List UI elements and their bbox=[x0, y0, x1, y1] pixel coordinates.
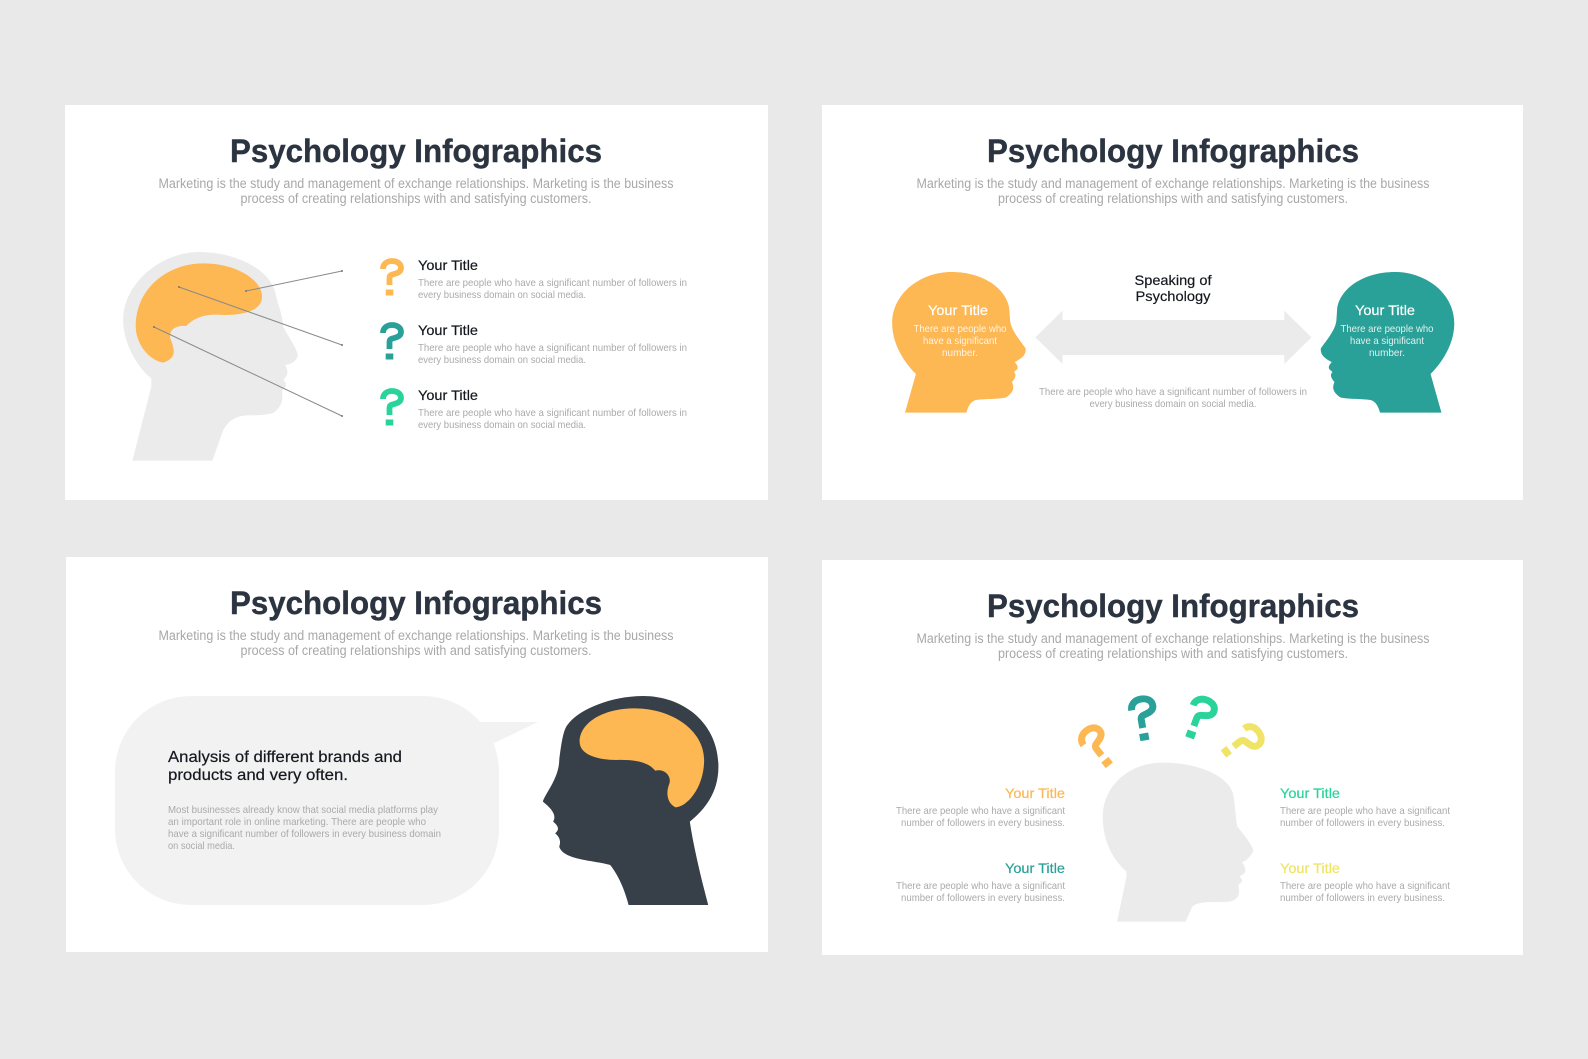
right lower text bbox=[1280, 860, 1450, 904]
grey head bbox=[1103, 763, 1253, 922]
item 2 text: There are people who have a significant number of followers in bbox=[418, 343, 687, 354]
bubble heading: products and very often. bbox=[168, 767, 348, 784]
bubble heading bbox=[168, 749, 402, 784]
icon: teal question mark bbox=[383, 325, 401, 360]
panel: brain regions bbox=[65, 105, 768, 500]
subtitle: process of creating relationships with and satisfying customers. bbox=[998, 646, 1348, 661]
double arrow bbox=[1035, 311, 1312, 364]
title: Psychology Infographics bbox=[230, 133, 602, 169]
teal head text: There are people who bbox=[1340, 324, 1434, 335]
item 3 text: There are people who have a significant number of followers in bbox=[418, 408, 687, 419]
right upper text: There are people who have a significant bbox=[1280, 806, 1450, 817]
arrow heading bbox=[1134, 272, 1212, 304]
left lower text: There are people who have a significant bbox=[896, 881, 1065, 892]
left upper text: number of followers in every business. bbox=[901, 818, 1065, 829]
item 3 text: every business domain on social media. bbox=[418, 420, 586, 431]
orange head text: have a significant bbox=[923, 336, 997, 347]
item 1 text: Your Title bbox=[418, 257, 478, 273]
subtitle: Marketing is the study and management of exchange relationships. Marketing is the business bbox=[916, 176, 1430, 191]
left upper text: Your Title bbox=[1005, 785, 1065, 801]
title: Psychology Infographics bbox=[230, 585, 602, 621]
teal head text: number. bbox=[1369, 348, 1405, 359]
teal head bbox=[1321, 272, 1454, 413]
item 3 text bbox=[418, 387, 687, 431]
right upper text bbox=[1280, 785, 1450, 829]
right upper text: number of followers in every business. bbox=[1280, 818, 1445, 829]
subtitle: Marketing is the study and management of exchange relationships. Marketing is the business bbox=[158, 176, 674, 191]
bubble description: Most businesses already know that social media platforms play bbox=[168, 805, 439, 816]
arrow heading: Psychology bbox=[1136, 288, 1210, 304]
bubble heading: Analysis of different brands and bbox=[168, 749, 402, 766]
item 1 text: There are people who have a significant number of followers in bbox=[418, 278, 687, 289]
panel: speaking of psychology bbox=[822, 105, 1523, 500]
subtitle bbox=[916, 631, 1430, 661]
icon: green question mark bbox=[383, 391, 401, 426]
connector lines bbox=[153, 270, 343, 417]
teal head text: Your Title bbox=[1355, 302, 1415, 318]
panel: question marks over head bbox=[822, 560, 1523, 955]
left lower text: number of followers in every business. bbox=[901, 893, 1065, 904]
right lower text: There are people who have a significant bbox=[1280, 881, 1450, 892]
orange head text: number. bbox=[942, 348, 978, 359]
orange head text: There are people who bbox=[914, 324, 1007, 335]
bubble description bbox=[168, 805, 441, 852]
arrow description: There are people who have a significant number of followers in bbox=[1039, 387, 1307, 398]
subtitle: Marketing is the study and management of exchange relationships. Marketing is the business bbox=[158, 628, 674, 643]
subtitle bbox=[916, 176, 1430, 206]
teal head text: have a significant bbox=[1350, 336, 1424, 347]
item 3 text: Your Title bbox=[418, 387, 478, 403]
subtitle: process of creating relationships with and satisfying customers. bbox=[240, 643, 592, 658]
subtitle: process of creating relationships with and satisfying customers. bbox=[998, 191, 1348, 206]
subtitle bbox=[158, 176, 674, 206]
head with highlighted brain bbox=[123, 252, 298, 461]
orange head bbox=[892, 272, 1026, 413]
bubble description: on social media. bbox=[168, 841, 235, 852]
arrow heading: Speaking of bbox=[1134, 272, 1212, 288]
speech bubble bbox=[115, 696, 538, 905]
left upper text bbox=[896, 785, 1065, 829]
item 2 text: Your Title bbox=[418, 322, 478, 338]
orange head text: Your Title bbox=[928, 302, 988, 318]
right lower text: Your Title bbox=[1280, 860, 1340, 876]
right upper text: Your Title bbox=[1280, 785, 1340, 801]
bubble description: an important role in online marketing. There are people who bbox=[168, 817, 426, 828]
icon: orange tilted question mark bbox=[1078, 724, 1120, 770]
left upper text: There are people who have a significant bbox=[896, 806, 1065, 817]
item 2 text bbox=[418, 322, 687, 366]
item 2 text: every business domain on social media. bbox=[418, 355, 586, 366]
item 1 text bbox=[418, 257, 687, 301]
right lower text: number of followers in every business. bbox=[1280, 893, 1445, 904]
panel: speech bubble and dark head bbox=[66, 557, 768, 952]
orange head text bbox=[914, 302, 1007, 359]
title: Psychology Infographics bbox=[987, 588, 1359, 624]
icon: orange question mark bbox=[383, 261, 401, 296]
subtitle: process of creating relationships with and satisfying customers. bbox=[240, 191, 592, 206]
bubble description: have a significant number of followers in every business domain bbox=[168, 829, 441, 840]
item 1 text: every business domain on social media. bbox=[418, 290, 586, 301]
title: Psychology Infographics bbox=[987, 133, 1359, 169]
icon: teal tilted question mark bbox=[1130, 697, 1158, 742]
arrow description bbox=[1039, 387, 1307, 410]
left lower text bbox=[896, 860, 1065, 904]
dark head with brain bbox=[543, 696, 718, 905]
arrow description: every business domain on social media. bbox=[1090, 399, 1256, 410]
teal head text bbox=[1340, 302, 1434, 359]
subtitle: Marketing is the study and management of exchange relationships. Marketing is the business bbox=[916, 631, 1430, 646]
left lower text: Your Title bbox=[1005, 860, 1065, 876]
icon: green tilted question mark bbox=[1182, 696, 1217, 743]
icon: yellow tilted question mark bbox=[1219, 723, 1265, 765]
subtitle bbox=[158, 628, 674, 658]
